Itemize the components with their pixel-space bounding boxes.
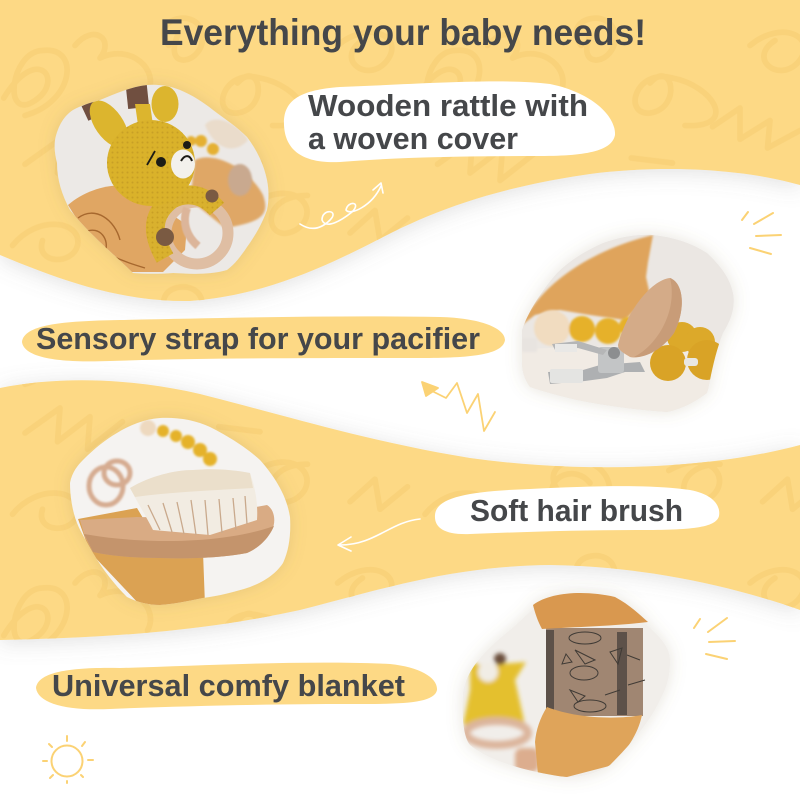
brush handle: [80, 505, 274, 558]
wooden clip disc: [618, 278, 682, 358]
label: wooden rattle: [284, 81, 615, 162]
metal hinge and upper arm: [550, 341, 624, 383]
wooden ring: [166, 202, 228, 264]
yellow blob: [22, 316, 505, 361]
blurred beads and clip: [186, 120, 252, 196]
label text: Sensory strap for your pacifier: [36, 321, 480, 356]
label: sensory strap: [22, 316, 505, 361]
bottom blanket fold: [535, 707, 642, 777]
label: universal comfy blanket: [36, 663, 437, 709]
label text: Soft hair brush: [470, 493, 683, 528]
bead cord: [684, 358, 698, 366]
metal clip: [548, 362, 645, 384]
blurred toy giraffe: [463, 653, 539, 772]
label: soft hair brush: [435, 486, 719, 534]
top yellow band: [0, 0, 800, 301]
arrow: zigzag: [422, 382, 495, 431]
blurred blanket: [522, 235, 653, 325]
icon: sparkle rays lower: [694, 618, 735, 659]
band printed trees and drawings: [546, 630, 645, 715]
arrow: to hair brush photo: [338, 519, 420, 551]
label text: Universal comfy blanket: [52, 668, 405, 703]
brown horn tips: [82, 85, 149, 121]
inner ring: [185, 208, 198, 246]
giraffe head: [107, 120, 195, 206]
white blob: [284, 81, 615, 162]
photo: blanket roll: [455, 590, 680, 785]
table surface: [515, 346, 740, 420]
label text: a woven cover: [308, 121, 518, 156]
icon: sun: [43, 736, 93, 783]
blurred blanket behind: [190, 157, 265, 228]
title: Everything your baby needs!: [160, 12, 646, 53]
white blob: [435, 486, 719, 534]
face details: [147, 141, 192, 167]
ears: [90, 86, 178, 145]
brush bristles: [135, 476, 258, 535]
muzzle: [171, 150, 195, 178]
photo: crochet giraffe rattle: [52, 82, 272, 277]
ring crochet cover: [155, 195, 217, 258]
rolled blanket: [68, 185, 187, 272]
arrow: squiggle to rattle label: [300, 183, 383, 228]
top blanket fold: [533, 593, 648, 629]
kraft paper band: [546, 628, 643, 716]
blurred rings: [89, 461, 130, 505]
icon: sparkle rays right: [742, 212, 781, 254]
yellow blob: [36, 663, 437, 709]
folded blanket: [78, 508, 205, 605]
photo: hair brush: [65, 410, 295, 610]
ring spots: [156, 190, 218, 246]
beads: [650, 322, 719, 381]
middle yellow band: [0, 380, 800, 640]
blurred beads: [522, 310, 637, 352]
label text: Wooden rattle with: [308, 88, 588, 123]
photo: pacifier clip: [515, 230, 740, 420]
blurred beads strand: [140, 420, 217, 466]
